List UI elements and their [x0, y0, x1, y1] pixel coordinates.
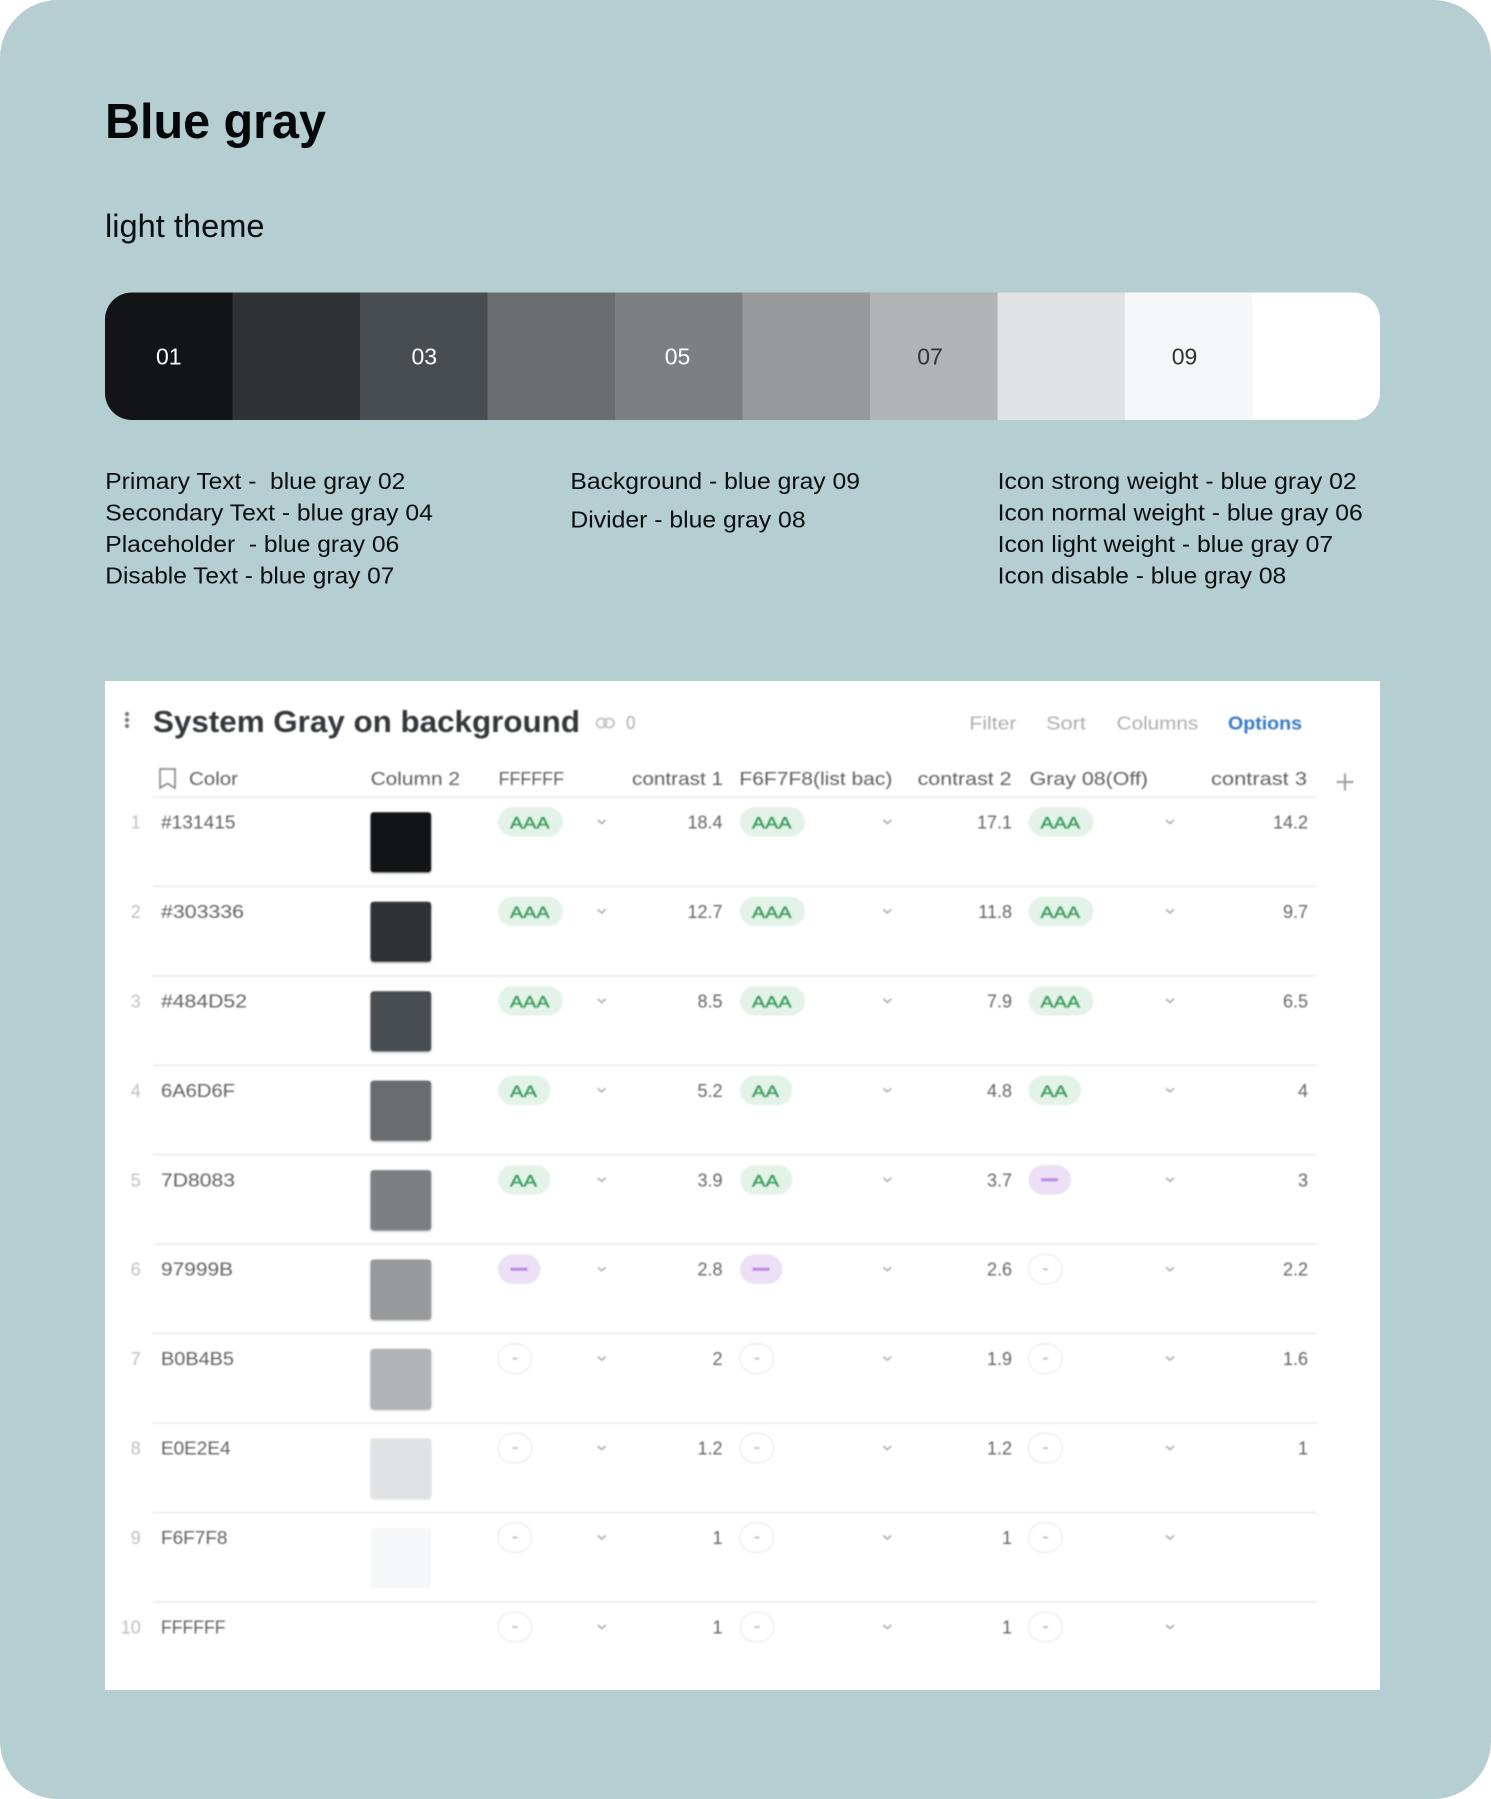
badge AAA	[498, 897, 563, 926]
icon: bookmark	[160, 769, 175, 788]
badge empty	[1028, 1523, 1062, 1552]
colour chip	[371, 1260, 431, 1320]
badge AA	[1028, 1076, 1081, 1105]
colour chip	[371, 1081, 431, 1141]
link count: 0	[626, 713, 636, 733]
swatch 09: 09	[1172, 344, 1197, 370]
row 1	[131, 807, 1317, 887]
badge AAA: AAA	[752, 904, 792, 922]
legend line: disable text: Disable Text - blue gray 07	[105, 562, 394, 588]
badge AA: AA	[510, 1172, 537, 1190]
contrast: 3	[1298, 1170, 1308, 1190]
header: gray 08: Gray 08(Off)	[1030, 769, 1148, 789]
hex label: 97999B	[161, 1260, 233, 1280]
colour chip	[371, 1170, 431, 1230]
header: contrast 2: contrast 2	[918, 769, 1012, 789]
row 4	[131, 1076, 1317, 1156]
index: 3	[131, 991, 141, 1011]
icon: add column	[1336, 774, 1354, 790]
swatch 01	[105, 292, 232, 420]
badge AAA	[740, 897, 805, 926]
chevron	[598, 909, 606, 913]
swatch 01: 01	[156, 344, 182, 370]
badge AAA	[740, 807, 805, 837]
colour chip	[371, 1528, 431, 1588]
swatch 03	[360, 292, 488, 420]
badge AA	[740, 1076, 792, 1105]
colour chip	[371, 902, 431, 962]
badge AAA: AAA	[1040, 904, 1080, 922]
badge AA	[498, 1076, 550, 1105]
chevron	[883, 1178, 891, 1181]
colour chip	[371, 1349, 431, 1409]
icon: link	[596, 718, 614, 728]
badge AAA: AAA	[1040, 814, 1080, 832]
chevron	[598, 999, 606, 1002]
chevron	[1166, 999, 1174, 1002]
index: 8	[131, 1439, 141, 1459]
contrast: 1	[1298, 1439, 1308, 1459]
badge empty	[740, 1612, 774, 1642]
badge empty	[1028, 1612, 1062, 1642]
contrast: 1	[1002, 1618, 1012, 1638]
badge AA: AA	[1040, 1083, 1068, 1101]
contrast: 1.6	[1283, 1349, 1308, 1369]
badge empty	[1028, 1344, 1062, 1373]
contrast: 7.9	[987, 991, 1012, 1011]
chevron	[883, 1625, 891, 1628]
background legend	[570, 468, 860, 532]
row 7	[131, 1344, 1317, 1424]
chevron	[598, 1446, 606, 1450]
badge AA: AA	[510, 1083, 537, 1101]
hex label: #484D52	[161, 991, 247, 1011]
swatch 05	[615, 292, 742, 420]
title: Blue gray	[105, 95, 326, 149]
badge empty	[740, 1344, 774, 1373]
hex label: 6A6D6F	[161, 1081, 235, 1101]
badge purple dash	[740, 1254, 782, 1284]
badge AAA: AAA	[510, 993, 550, 1011]
hex label: 7D8083	[161, 1170, 235, 1190]
badge AA	[740, 1165, 792, 1194]
chevron	[883, 1088, 891, 1092]
chevron	[1166, 820, 1174, 824]
legend line: secondary text: Secondary Text - blue gray 04	[105, 500, 433, 526]
contrast: 4.8	[987, 1081, 1012, 1101]
legend line: placeholder: Placeholder - blue gray 06	[105, 531, 399, 557]
header: F6F7F8: F6F7F8(list bac)	[739, 769, 892, 789]
contrast: 1.2	[697, 1439, 722, 1459]
chevron	[1166, 1625, 1174, 1628]
colour chip	[371, 812, 431, 872]
header: FFFFFF: FFFFFF	[499, 769, 564, 789]
row 6	[131, 1254, 1317, 1335]
badge empty	[498, 1433, 532, 1463]
contrast: 18.4	[687, 812, 722, 832]
contrast: 1	[712, 1528, 722, 1548]
contrast: 1.9	[987, 1349, 1012, 1369]
toolbar: options: Options	[1228, 714, 1302, 734]
icon legend	[998, 468, 1363, 588]
legend line: icon light: Icon light weight - blue gray 07	[998, 531, 1333, 557]
row 2	[131, 897, 1317, 977]
contrast: 8.5	[697, 991, 722, 1011]
swatch 10	[1252, 292, 1380, 420]
hex label: F6F7F8	[161, 1528, 228, 1548]
index: 10	[121, 1618, 141, 1638]
chevron	[1166, 1088, 1174, 1092]
badge AAA	[1028, 897, 1094, 926]
hex label: E0E2E4	[161, 1439, 230, 1459]
contrast: 6.5	[1283, 991, 1308, 1011]
palette bar	[105, 292, 1380, 420]
swatch 03: 03	[411, 344, 437, 370]
colour chip	[371, 1438, 431, 1498]
badge purple dash	[1028, 1165, 1071, 1194]
index: 7	[131, 1349, 141, 1369]
hex label: B0B4B5	[161, 1349, 234, 1369]
chevron	[883, 999, 891, 1002]
chevron	[1166, 1357, 1174, 1360]
badge empty	[1028, 1433, 1062, 1463]
row 9	[131, 1523, 1317, 1603]
swatch 07: 07	[917, 344, 943, 370]
text usage legend	[105, 468, 433, 588]
swatch 06	[742, 292, 870, 420]
contrast: 4	[1298, 1081, 1308, 1101]
badge empty	[498, 1523, 532, 1552]
chevron	[1166, 1446, 1174, 1450]
chevron	[883, 1267, 891, 1271]
badge AAA	[740, 986, 805, 1016]
swatch 02	[232, 292, 360, 420]
header: color: Color	[189, 769, 238, 789]
badge AAA: AAA	[752, 993, 792, 1011]
header: contrast 3: contrast 3	[1211, 769, 1307, 789]
badge empty	[1028, 1254, 1062, 1284]
swatch 09	[1125, 292, 1252, 420]
header row	[153, 769, 1354, 798]
swatch 07	[870, 292, 998, 420]
badge AA: AA	[752, 1172, 779, 1190]
chevron	[598, 1625, 606, 1628]
contrast: 3.9	[697, 1170, 722, 1190]
toolbar: filter: Filter	[969, 714, 1016, 734]
chevron	[883, 1446, 891, 1450]
colour chip	[371, 991, 431, 1051]
index: 4	[131, 1081, 141, 1101]
chevron	[883, 1536, 891, 1539]
legend line: primary text: Primary Text - blue gray 02	[105, 468, 405, 494]
badge empty	[740, 1433, 774, 1463]
row 8	[131, 1433, 1317, 1514]
index: 1	[131, 812, 141, 832]
chevron	[1166, 1267, 1174, 1271]
badge empty	[740, 1523, 774, 1552]
badge AAA: AAA	[752, 814, 792, 832]
badge empty	[498, 1612, 532, 1642]
table title: System Gray on background	[153, 704, 580, 739]
chevron	[598, 820, 606, 824]
badge AAA: AAA	[1040, 993, 1080, 1011]
contrast: 2	[712, 1349, 722, 1369]
header: contrast 1: contrast 1	[632, 769, 723, 789]
contrast: 3.7	[987, 1170, 1012, 1190]
hex label: FFFFFF	[161, 1618, 226, 1638]
header: column 2: Column 2	[371, 769, 460, 789]
legend line: icon strong: Icon strong weight - blue gray 02	[998, 468, 1357, 494]
badge AAA: AAA	[510, 904, 550, 922]
badge AA	[498, 1165, 550, 1194]
toolbar: sort: Sort	[1046, 714, 1086, 734]
legend line: icon normal: Icon normal weight - blue gray 06	[998, 500, 1363, 526]
chevron	[598, 1178, 606, 1181]
swatch 08	[998, 292, 1125, 420]
chevron	[1166, 1178, 1174, 1181]
contrast: 2.8	[697, 1260, 722, 1280]
contrast: 11.8	[978, 902, 1012, 922]
contrast: 14.2	[1273, 812, 1308, 832]
badge empty	[498, 1344, 532, 1373]
contrast: 2.6	[987, 1260, 1012, 1280]
chevron	[598, 1536, 606, 1539]
badge AA: AA	[752, 1083, 779, 1101]
chevron	[1166, 1536, 1174, 1539]
chevron	[598, 1267, 606, 1271]
icon: drag dots	[125, 712, 129, 728]
row 3	[131, 986, 1317, 1066]
index: 6	[131, 1260, 141, 1280]
badge AAA: AAA	[510, 814, 550, 832]
chevron	[598, 1088, 606, 1092]
table contents	[121, 704, 1353, 1642]
legend line: background: Background - blue gray 09	[570, 468, 860, 494]
contrast: 1.2	[987, 1439, 1012, 1459]
index: 2	[131, 902, 141, 922]
hex label: #303336	[161, 902, 244, 922]
row 5	[131, 1165, 1317, 1245]
chevron	[1166, 909, 1174, 913]
contrast: 2.2	[1283, 1260, 1308, 1280]
contrast: 5.2	[697, 1081, 722, 1101]
hex label: #131415	[161, 812, 236, 832]
chevron	[883, 909, 891, 913]
toolbar: columns: Columns	[1117, 714, 1198, 734]
badge AAA	[1028, 807, 1094, 837]
panel: system gray table	[105, 681, 1380, 1690]
contrast: 1	[1002, 1528, 1012, 1548]
badge AAA	[498, 807, 563, 837]
swatch 04	[488, 292, 615, 420]
swatch 05: 05	[665, 344, 690, 370]
chevron	[598, 1357, 606, 1360]
chevron	[883, 1357, 891, 1360]
contrast: 1	[712, 1618, 722, 1638]
contrast: 17.1	[977, 812, 1012, 832]
chevron	[883, 820, 891, 824]
row 10	[121, 1612, 1174, 1642]
subtitle: light theme	[105, 208, 264, 244]
badge purple dash	[498, 1254, 540, 1284]
index: 5	[131, 1170, 141, 1190]
badge AAA	[1028, 986, 1094, 1016]
legend line: divider: Divider - blue gray 08	[570, 506, 806, 532]
contrast: 12.7	[687, 902, 722, 922]
legend line: icon disable: Icon disable - blue gray 08	[998, 562, 1286, 588]
badge AAA	[498, 986, 563, 1016]
index: 9	[131, 1528, 141, 1548]
contrast: 9.7	[1283, 902, 1308, 922]
